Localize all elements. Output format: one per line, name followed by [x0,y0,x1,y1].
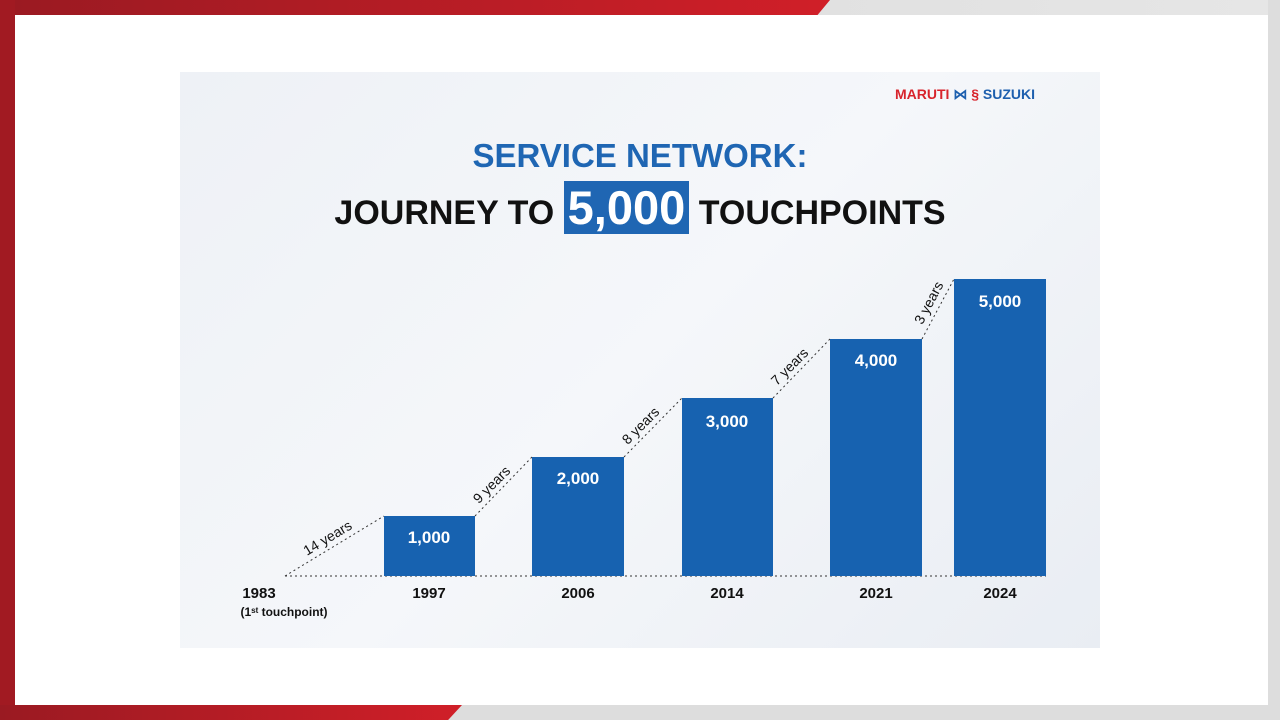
bar chart: 1983 [242,585,276,602]
bar chart: 1,000 [408,528,450,547]
panel: infographic [180,72,1100,648]
frame: top bar [0,0,1280,15]
bar chart: 2,000 [557,469,599,488]
bar chart: 7 years [768,345,811,388]
bar chart: 2014 [710,585,744,602]
bar chart: 3 years [911,279,946,327]
subtitle: JOURNEY TO 5,000 TOUCHPOINTS [334,181,946,234]
bar chart: (1ˢᵗ touchpoint) [240,605,328,619]
bar chart: 1997 [412,585,446,602]
bar chart: 2024 [983,585,1017,602]
bar chart: 9 years [470,463,513,506]
bar chart: 14 years [300,517,355,558]
logo: MARUTI ⋈ § SUZUKI [895,86,1035,102]
bar chart: 2021 [859,585,893,602]
bar chart: 4,000 [855,351,897,370]
bar chart: 3,000 [706,412,748,431]
bar chart: 8 years [619,404,662,447]
bar chart: 2006 [561,585,595,602]
bar chart: 5,000 [979,292,1021,311]
title: SERVICE NETWORK: [473,137,807,174]
